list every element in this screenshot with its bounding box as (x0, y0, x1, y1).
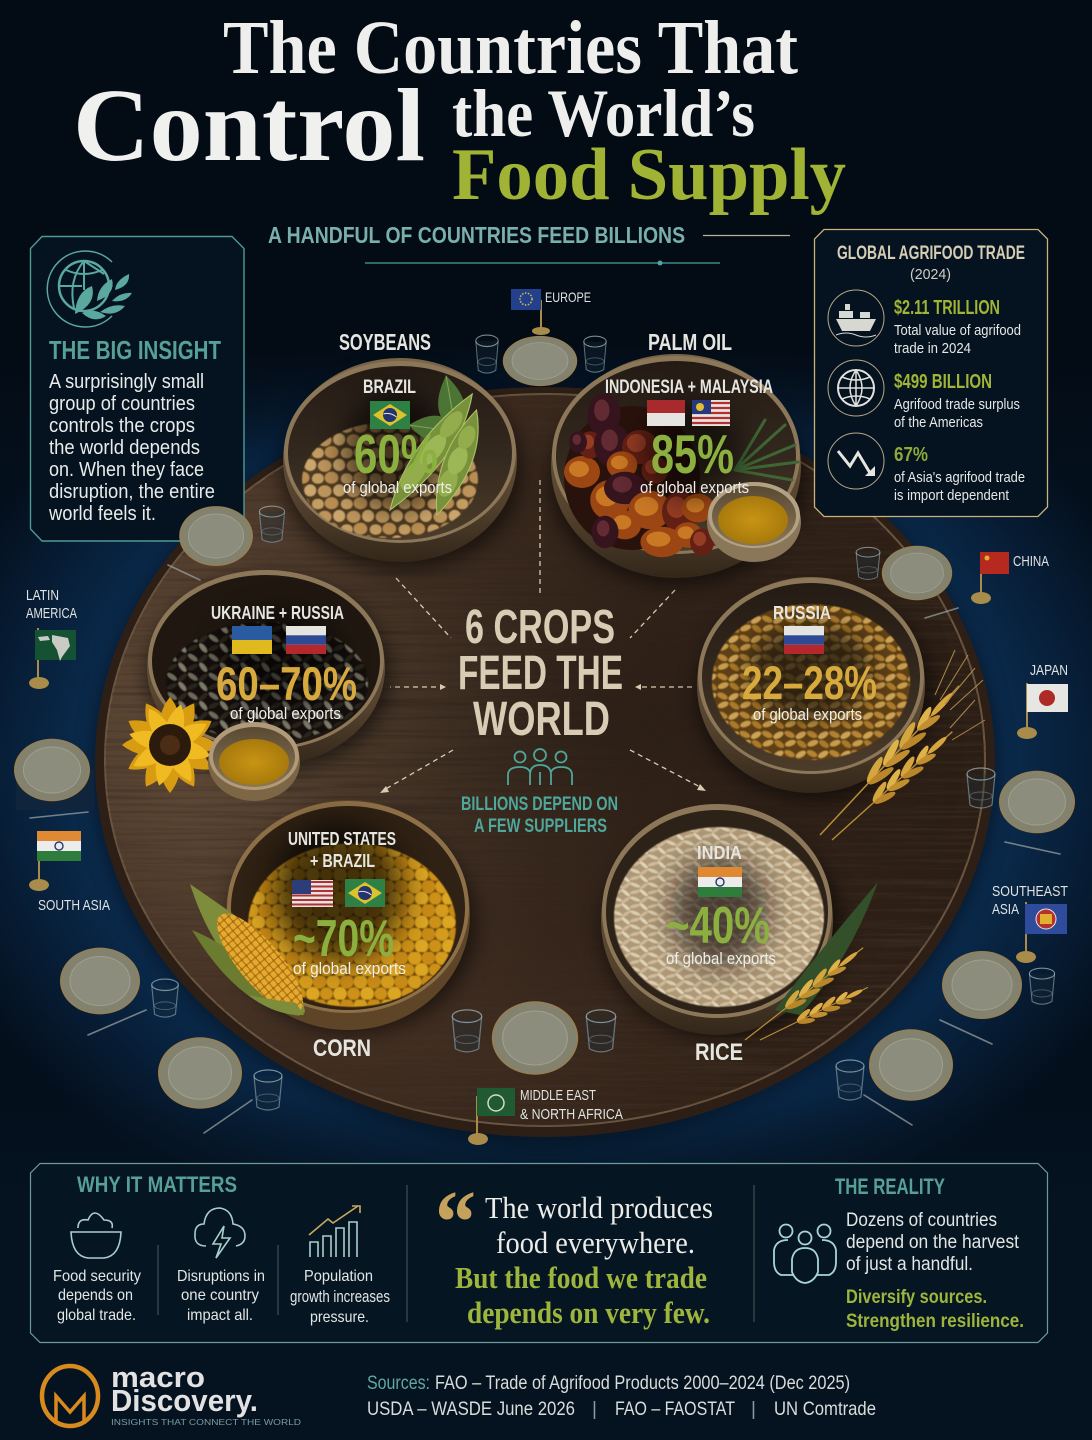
wheat stalks (812, 650, 985, 848)
panel: wheat bowl (697, 577, 985, 848)
flag: Malaysia (692, 400, 730, 426)
subtitle (268, 222, 790, 266)
central heading: FEED THE (458, 647, 623, 700)
icon: group of people (774, 1224, 836, 1283)
central heading: 6 CROPS (465, 601, 615, 654)
panel: palm oil bowl: 85% (651, 423, 734, 485)
sources: FAO – Trade of Agrifood Products 2000–2024 (Dec 2025) (435, 1373, 850, 1394)
panel: palm oil bowl: of global exports (640, 478, 749, 497)
panel: palm oil bowl (550, 329, 806, 584)
reality call to action: Diversify sources. (846, 1287, 987, 1308)
panel: soybeans bowl (282, 329, 522, 570)
rice stalks (695, 882, 878, 1066)
flag: Europe (511, 289, 591, 335)
the reality heading: THE REALITY (835, 1174, 945, 1199)
flag: Middle East and North Africa: MIDDLE EAST (520, 1087, 596, 1104)
stat: billion: of the Americas (894, 414, 983, 431)
panel: rice bowl (601, 804, 878, 1066)
reality text: Dozens of countries (846, 1210, 997, 1231)
central caption (461, 794, 618, 837)
stat: import dependence (894, 444, 1025, 504)
reality text: depend on the harvest (846, 1232, 1020, 1253)
panel: soybeans bowl: of global exports (343, 478, 452, 497)
cutlery (30, 565, 1060, 1133)
corn cob (190, 884, 371, 1062)
flag: Latin America: LATIN (26, 587, 59, 604)
palm fruits (564, 393, 714, 557)
dashed arrows to the bowls (380, 480, 706, 793)
title (73, 6, 846, 216)
rice stalks: RICE (695, 1039, 743, 1066)
reality call to action (846, 1287, 1024, 1332)
quote: But the food we trade (455, 1260, 707, 1295)
panel: sunflower bowl: 60–70% (216, 657, 357, 710)
flag: Middle East and North Africa (468, 1087, 623, 1145)
icon: people (508, 749, 572, 785)
icon: globe (828, 360, 884, 416)
flag: Latin America (26, 587, 77, 689)
flag: China (971, 552, 1049, 604)
icon: falling trend (828, 433, 884, 489)
corn label: UNITED STATES (288, 828, 396, 849)
flag: Southeast Asia: ASIA (992, 901, 1019, 918)
sources: FAO – FAOSTAT (615, 1399, 735, 1420)
stat: trillion: Total value of agrifood (894, 322, 1021, 339)
sunflower (122, 697, 218, 793)
flag: Japan (1017, 662, 1068, 739)
title: the World’s (452, 75, 755, 151)
flag: China: CHINA (1013, 553, 1049, 570)
sunflower bowl label: UKRAINE + RUSSIA (211, 602, 344, 623)
stat: import dependence: is import dependent (894, 487, 1010, 504)
insight text: A surprisingly small (49, 371, 204, 393)
panel: wheat bowl: 22–28% (742, 656, 877, 709)
panel: bottom summary (30, 1164, 1048, 1342)
insight text: on. When they face (49, 459, 204, 481)
place settings: glasses (152, 335, 1055, 1110)
icon: cargo ship (828, 290, 884, 346)
stat: trillion: $2.11 TRILLION (894, 297, 1000, 319)
logo: Discovery. (111, 1383, 258, 1418)
central heading: WORLD (473, 693, 610, 746)
oil dish (707, 482, 801, 562)
soybeans label: SOYBEANS (339, 329, 431, 355)
panel: global agrifood trade (814, 230, 1048, 516)
reality text: of just a handful. (846, 1254, 973, 1275)
flag: South Asia (29, 831, 110, 914)
central caption: A FEW SUPPLIERS (474, 816, 607, 837)
why: food security: Food security (53, 1268, 141, 1285)
panel: sunflower bowl: of global exports (230, 704, 341, 723)
quote: depends on very few. (467, 1295, 710, 1330)
stat: billion (894, 371, 1020, 431)
why: food security (53, 1268, 141, 1324)
why: food security: depends on (58, 1287, 133, 1304)
why: disruptions: Disruptions in (177, 1268, 265, 1285)
quote mark: “ (435, 1173, 476, 1272)
panel: the big insight (30, 236, 244, 541)
insight text: world feels it. (48, 503, 156, 525)
flag: Southeast Asia (992, 883, 1068, 963)
place settings: plates (14, 336, 1075, 1109)
panel: wheat bowl: of global exports (753, 705, 862, 724)
panel: palm oil bowl: INDONESIA + MALAYSIA (605, 377, 773, 398)
sources: Sources: (367, 1373, 430, 1394)
insight text: group of countries (49, 393, 195, 415)
panel: corn bowl: of global exports (293, 959, 406, 978)
flag: Europe: EUROPE (545, 289, 591, 305)
stat: trillion (894, 297, 1021, 357)
logo (42, 1362, 301, 1427)
stat: import dependence: of Asia's agrifood trade (894, 469, 1025, 486)
why: disruptions: one country (181, 1287, 259, 1304)
flag: Southeast Asia: SOUTHEAST (992, 883, 1068, 900)
reality call to action: Strengthen resilience. (846, 1311, 1024, 1332)
panel: sunflower bowl (122, 570, 390, 801)
central heading (458, 601, 623, 746)
panel: corn bowl: + BRAZIL (310, 850, 375, 871)
why: population: growth increases (290, 1287, 390, 1306)
logo: macro (111, 1362, 205, 1394)
panel: global agrifood trade: (2024) (910, 266, 951, 283)
insight text: controls the crops (49, 415, 195, 437)
flag: Indonesia (647, 400, 685, 426)
flag: Middle East and North Africa: & NORTH AFRICA (520, 1106, 623, 1123)
plate overlapping insight panel (179, 506, 253, 566)
stat: import dependence: 67% (894, 444, 928, 466)
flag: USA (292, 880, 333, 907)
panel: soybeans bowl: 60% (354, 423, 438, 485)
insight text (48, 371, 215, 525)
wooden table (93, 387, 997, 1143)
title: The Countries That (223, 6, 798, 90)
quote: food everywhere. (496, 1225, 695, 1260)
sources: | (592, 1399, 597, 1420)
quote (455, 1190, 713, 1330)
why: disruptions: impact all. (187, 1307, 253, 1324)
sources: USDA – WASDE June 2026 (367, 1399, 575, 1420)
icon: rice bowl (71, 1213, 121, 1258)
panel: the big insight: THE BIG INSIGHT (49, 335, 221, 365)
icon: growth chart (309, 1206, 360, 1257)
panel: corn bowl: ~70% (293, 910, 394, 968)
logo: INSIGHTS THAT CONNECT THE WORLD (111, 1418, 301, 1427)
why it matters heading: WHY IT MATTERS (77, 1172, 237, 1197)
oil dish (208, 722, 300, 801)
panel: rice bowl: of global exports (666, 949, 776, 968)
sources: UN Comtrade (774, 1399, 876, 1420)
title: Control (73, 68, 425, 183)
central caption: BILLIONS DEPEND ON (461, 794, 618, 815)
why: population: Population (304, 1268, 373, 1285)
insight text: the world depends (49, 437, 200, 459)
why: disruptions (177, 1268, 265, 1324)
palm oil label: PALM OIL (648, 329, 732, 355)
wheat label: RUSSIA (773, 602, 831, 623)
subtitle: A HANDFUL OF COUNTRIES FEED BILLIONS (268, 222, 685, 248)
corn cob: CORN (313, 1035, 371, 1062)
icon: globe with leaves (47, 251, 132, 327)
title: Food Supply (452, 134, 846, 216)
sources (367, 1373, 876, 1420)
why: population: pressure. (310, 1309, 369, 1326)
flag: Japan: JAPAN (1030, 662, 1068, 679)
panel: rice bowl: ~40% (666, 897, 770, 955)
flag: Latin America: AMERICA (26, 605, 77, 622)
stat: billion: Agrifood trade surplus (894, 396, 1020, 413)
panel: global agrifood trade: GLOBAL AGRIFOOD TRADE (837, 243, 1025, 264)
sources: | (751, 1399, 756, 1420)
insight text: disruption, the entire (49, 481, 215, 503)
why: population (290, 1268, 390, 1326)
palm fronds (735, 420, 798, 480)
panel: soybeans bowl: BRAZIL (363, 377, 416, 398)
reality text (846, 1210, 1020, 1275)
why: food security: global trade. (57, 1307, 136, 1324)
stat: billion: $499 BILLION (894, 371, 992, 393)
soy pods and leaves (377, 373, 492, 519)
panel: corn bowl (190, 800, 476, 1062)
stat: trillion: trade in 2024 (894, 340, 971, 357)
icon: storm cloud (195, 1208, 245, 1258)
rice label: INDIA (697, 842, 742, 863)
quote: The world produces (485, 1190, 713, 1225)
flag: South Asia: SOUTH ASIA (38, 897, 110, 914)
